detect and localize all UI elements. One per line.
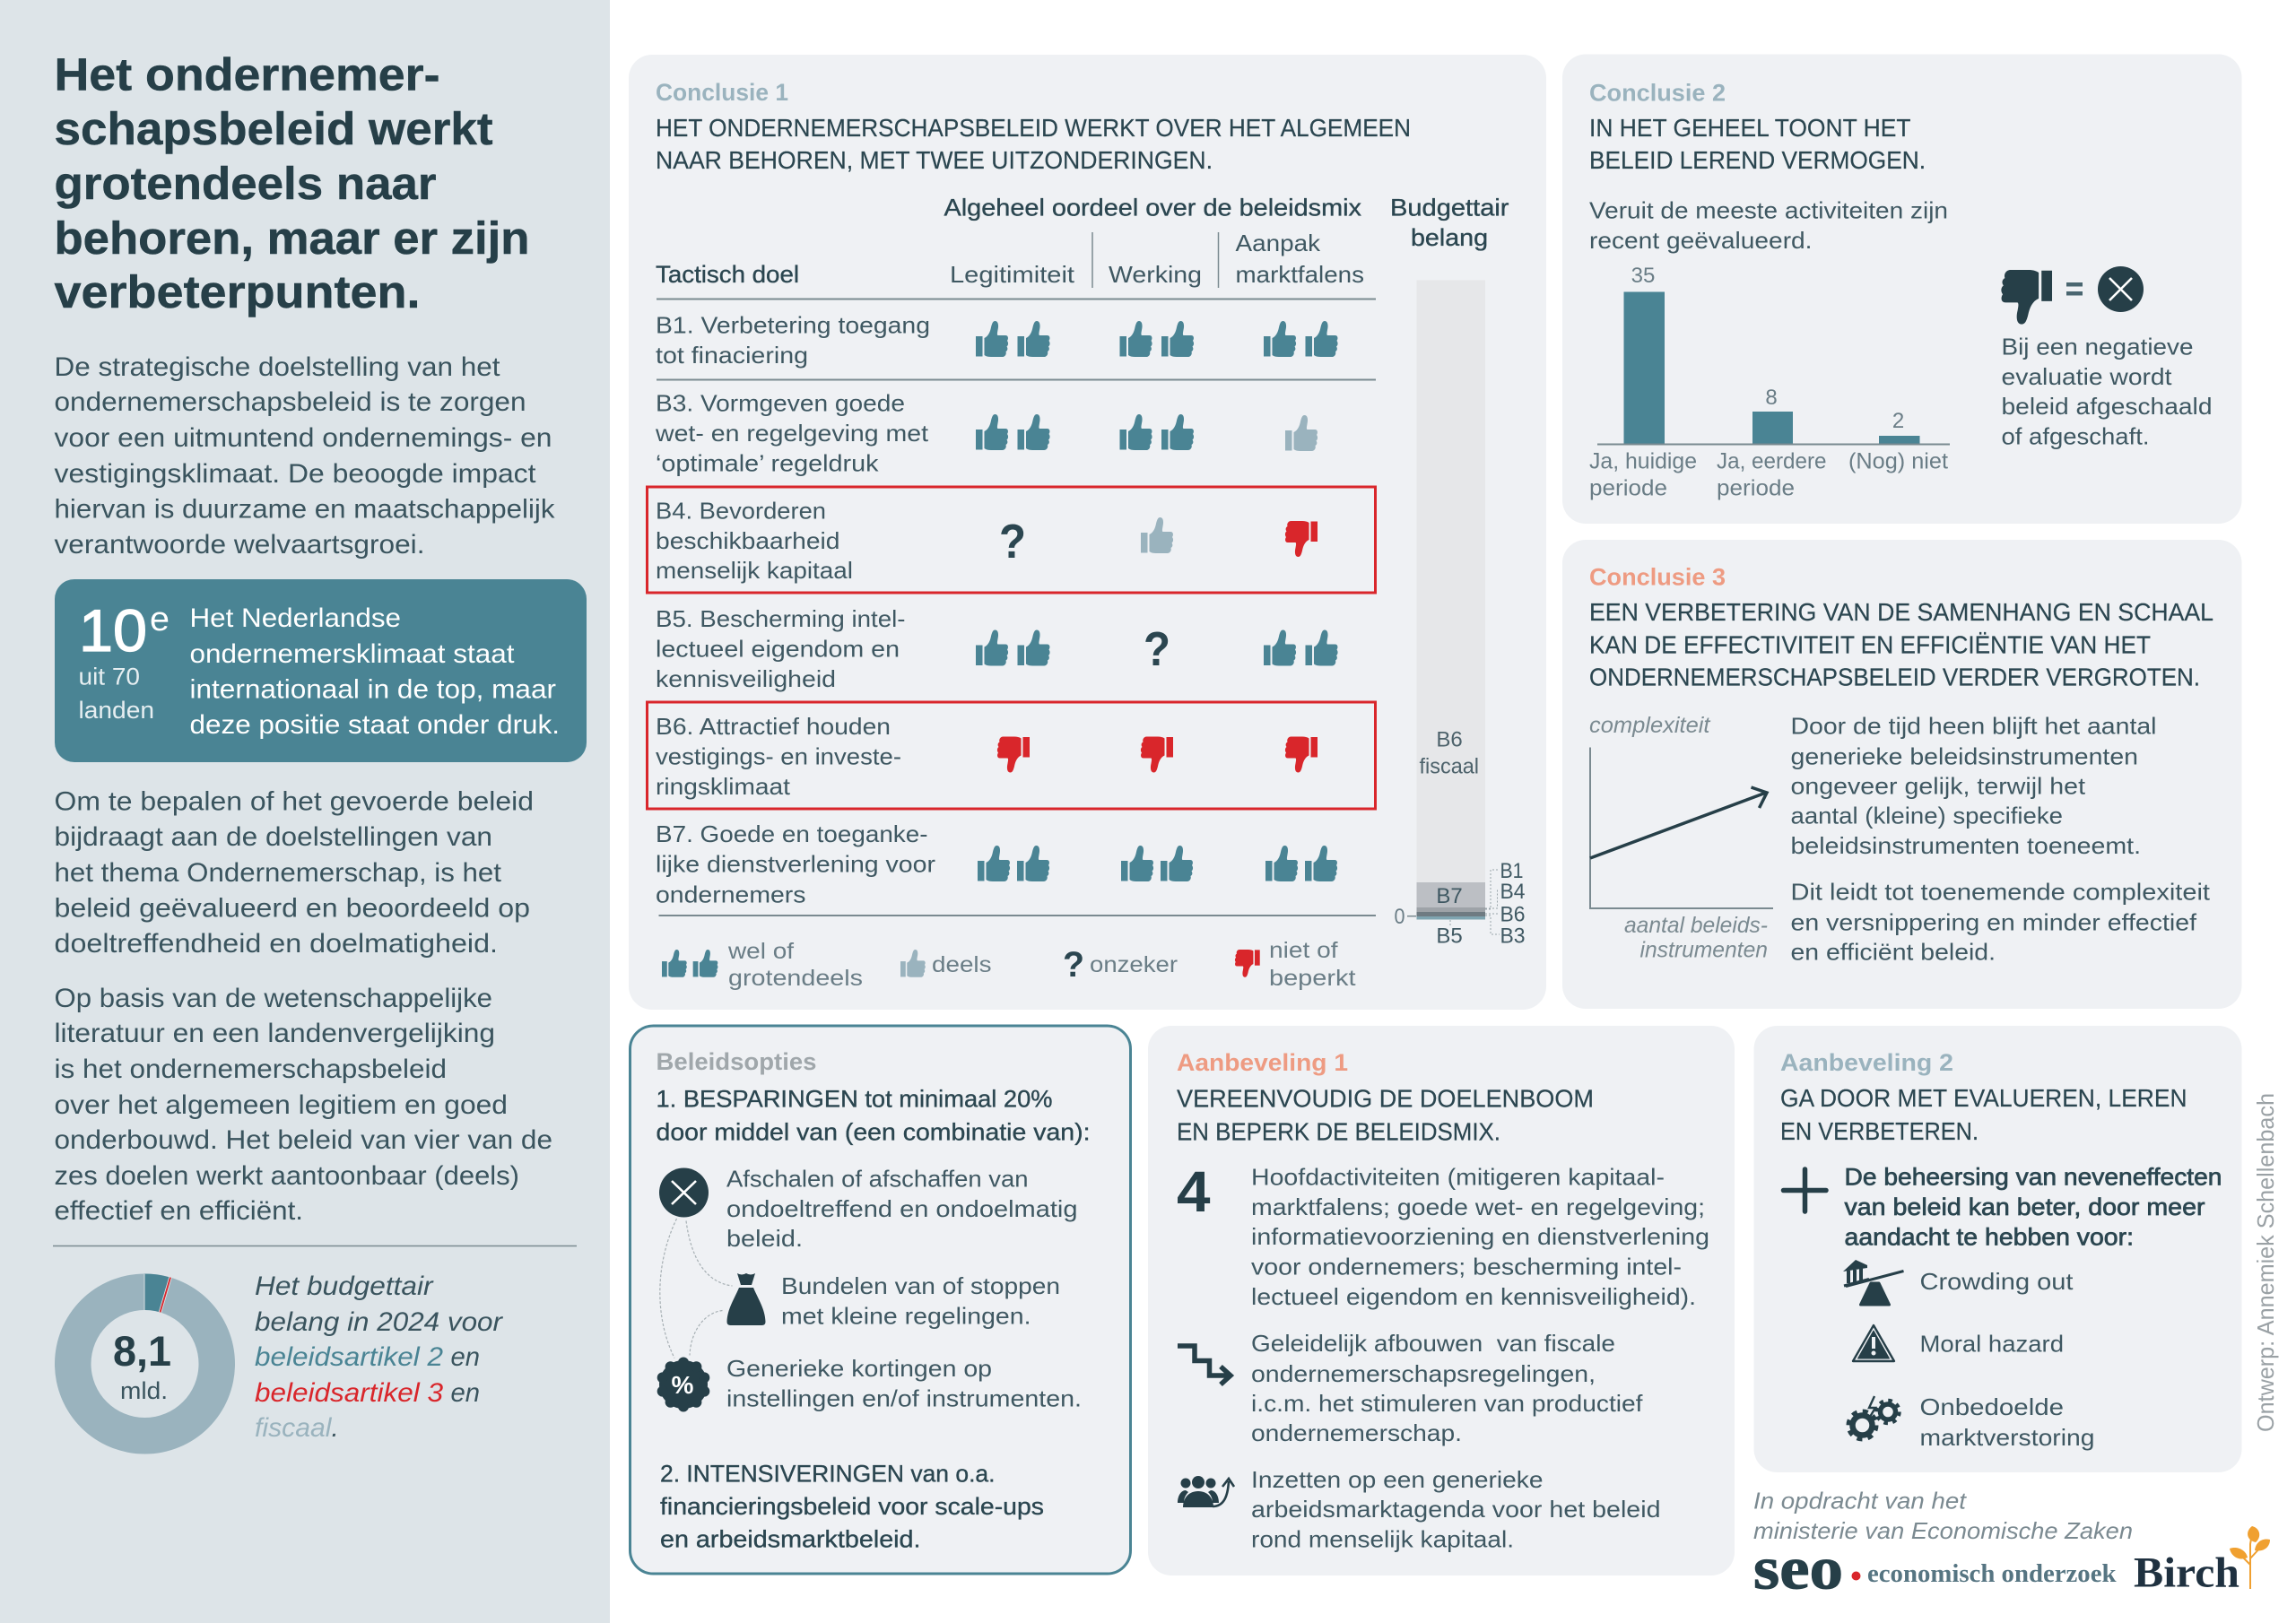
bar chart: evaluations: 35 <box>1631 264 1655 288</box>
text: bundelen: met kleine regelingen. <box>781 1302 1031 1329</box>
text: recent evaluated <box>1589 197 1948 254</box>
callout: 10e of 70 countries: landen <box>79 697 154 724</box>
logo: SEO economisch onderzoek <box>1753 1533 2117 1601</box>
heading: Aanbeveling 1 <box>1177 1049 1594 1146</box>
row: B5: B5. Bescherming intel- <box>656 605 906 632</box>
callout: 10e of 70 countries: ondernemersklimaat staat <box>190 639 515 669</box>
title: Het ondernemer- <box>54 48 439 100</box>
text: over time: Door de tijd heen blijft het aantal <box>1790 712 2156 739</box>
text block: strategic objective: vestigingsklimaat. De beoogde impact <box>54 459 536 489</box>
row: B7: B7. Goede en toeganke- <box>656 820 927 847</box>
text block: strategic objective: hiervan is duurzame en maatschappelijk <box>54 495 555 524</box>
row: B6 (highlighted): vestigings- en investe- <box>656 742 901 769</box>
text: hoofdactiviteiten <box>1251 1164 1709 1310</box>
row: B6 (highlighted): ringsklimaat <box>656 773 791 800</box>
line chart: complexity <box>1589 713 1773 963</box>
text block: evaluation: Om te bepalen of het gevoerde beleid <box>54 787 534 816</box>
heading: Conclusie 1: Conclusie 1 <box>656 79 788 106</box>
row: B3: B3. Vormgeven goede <box>656 389 905 416</box>
text: kortingen: Generieke kortingen op <box>726 1355 992 1382</box>
panel: Beleidsopties <box>630 1026 1130 1574</box>
line chart: complexity: complexiteit <box>1589 713 1711 738</box>
icon: percent badge: % <box>672 1371 694 1399</box>
table header: Legitimiteit <box>950 261 1075 288</box>
panel: Conclusie 2 <box>1562 54 2242 524</box>
heading: Conclusie 2: BELEID LEREND VERMOGEN. <box>1589 146 1926 174</box>
panel: Aanbeveling 2 <box>1754 1026 2242 1472</box>
panel: Aanbeveling 1 <box>1148 1026 1735 1575</box>
text: afbouwen: Geleidelijk afbouwen van fiscale <box>1251 1330 1615 1357</box>
text: negative evaluation: of afgeschaft. <box>2002 423 2149 450</box>
heading: Conclusie 2: Conclusie 2 <box>1589 79 1726 106</box>
heading: Beleidsopties: 1. BESPARINGEN tot minimaal 20% <box>657 1085 1053 1112</box>
row: B3: wet- en regelgeving met <box>655 420 929 447</box>
bar chart: evaluations: 8 <box>1765 386 1778 410</box>
logo: SEO economisch onderzoek: seo <box>1753 1533 1843 1601</box>
text: intensiveringen: en arbeidsmarktbeleid. <box>660 1526 920 1553</box>
text: over time: beleidsinstrumenten toeneemt. <box>1790 832 2141 859</box>
text: commissioned by: In opdracht van het <box>1753 1487 1968 1514</box>
heading: Conclusie 1 <box>656 79 1411 174</box>
row: B7 <box>656 820 1337 907</box>
heading: Beleidsopties <box>657 1048 1091 1146</box>
text: inzetten: Inzetten op een generieke <box>1251 1466 1543 1493</box>
legend: niet of <box>1269 938 1338 963</box>
title: behoren, maar er zijn <box>54 213 529 264</box>
row: B6 (highlighted): B6. Attractief houden <box>656 713 891 740</box>
bar chart: evaluations: (Nog) niet <box>1848 448 1948 473</box>
text: recent evaluated: recent geëvalueerd. <box>1589 227 1812 254</box>
row: B1: tot finaciering <box>656 342 808 369</box>
row: B6 (highlighted) <box>648 702 1376 809</box>
text: onbedoelde marktverstoring <box>1919 1393 2095 1451</box>
panel: Conclusie 3 <box>1562 540 2242 1009</box>
credit: design: Ontwerp: Annemiek Schellenbach <box>2252 1093 2279 1432</box>
text: complexity result: en versnippering en minder effectief <box>1790 909 2197 936</box>
icon: money bag <box>726 1273 766 1325</box>
text: afschalen: beleid. <box>726 1225 803 1252</box>
text: intensiveringen: financieringsbeleid voor scale-ups <box>660 1493 1044 1520</box>
row: B5: kennisveiligheid <box>656 665 836 692</box>
text block: strategic objective: ondernemerschapsbeleid is te zorgen <box>54 387 526 417</box>
heading: Aanbeveling 1: VEREENVOUDIG DE DOELENBOOM <box>1177 1085 1594 1112</box>
row: B4 (highlighted): ? <box>999 515 1026 568</box>
panel: Conclusie 1 <box>629 55 1546 1010</box>
text: over time <box>1790 712 2156 859</box>
text: hoofdactiviteiten: informatievoorziening en dienstverlening <box>1251 1223 1709 1250</box>
text block: strategic objective <box>54 352 555 560</box>
text block: findings <box>54 984 552 1226</box>
text block: findings: is het ondernemerschapsbeleid <box>54 1055 447 1084</box>
heading: Conclusie 1: HET ONDERNEMERSCHAPSBELEID WERKT OVER HET ALGEMEEN <box>656 114 1411 142</box>
heading: Aanbeveling 1: Aanbeveling 1 <box>1177 1049 1348 1076</box>
text block: budget explanation: en <box>450 1378 480 1408</box>
text block: budget explanation: belang in 2024 voor <box>255 1307 503 1337</box>
donut chart: budget 8,1 mld: mld. <box>120 1377 168 1404</box>
text: negative evaluation <box>2002 334 2212 450</box>
table header: Algeheel oordeel over de beleidsmix <box>944 194 1361 221</box>
text: beheersing: De beheersing van neveneffecten <box>1844 1164 2222 1191</box>
text block: findings: onderbouwd. Het beleid van vier van de <box>54 1125 552 1155</box>
icon: cross circle <box>659 1167 709 1218</box>
callout: 10e of 70 countries <box>55 579 587 762</box>
legend <box>662 938 1356 991</box>
dashed connectors <box>660 1219 732 1358</box>
heading: Conclusie 3 <box>1589 563 2213 690</box>
heading: Conclusie 3: Conclusie 3 <box>1589 563 1726 590</box>
text: hoofdactiviteiten: Hoofdactiviteiten (mitigeren kapitaal- <box>1251 1164 1665 1191</box>
text: negative evaluation: evaluatie wordt <box>2002 363 2172 390</box>
text block: findings: Op basis van de wetenschappelijke <box>54 984 492 1013</box>
icon: plus <box>1783 1169 1826 1211</box>
stacked bar: budgettair belang: 0 <box>1394 905 1405 929</box>
icon: thumb down equals cross <box>2001 266 2144 325</box>
bar chart: evaluations: Ja, eerdere <box>1717 448 1826 473</box>
text: afbouwen: ondernemerschap. <box>1251 1419 1462 1446</box>
text block: findings: literatuur en een landenvergelijking <box>54 1019 495 1048</box>
title: schapsbeleid werkt <box>54 103 493 154</box>
text block: budget explanation <box>255 1271 503 1443</box>
row: B7: ondernemers <box>656 881 805 907</box>
logo: Birch: Birch <box>2134 1549 2239 1596</box>
text block: findings: over het algemeen legitiem en goed <box>54 1090 508 1120</box>
heading: Conclusie 3: KAN DE EFFECTIVITEIT EN EFFICIËNTIE VAN HET <box>1589 631 2151 658</box>
line chart: complexity: instrumenten <box>1639 938 1768 963</box>
text: complexity result: en efficiënt beleid. <box>1790 938 1996 965</box>
bar chart: evaluations: periode <box>1589 475 1667 500</box>
text: inzetten: arbeidsmarktagenda voor het beleid <box>1251 1496 1661 1523</box>
bar chart: evaluations: Ja, huidige <box>1589 448 1697 473</box>
stacked bar: budgettair belang: B5 <box>1436 924 1463 949</box>
table header: Werking <box>1109 261 1202 288</box>
bar chart: evaluations <box>1589 264 1950 500</box>
donut chart: budget 8,1 mld: 8,1 <box>113 1327 171 1375</box>
text block: strategic objective: De strategische doelstelling van het <box>54 352 500 382</box>
stacked bar: budgettair belang: fiscaal <box>1419 755 1479 778</box>
heading: Aanbeveling 1: EN BEPERK DE BELEIDSMIX. <box>1177 1117 1500 1146</box>
row: B3: ‘optimale’ regeldruk <box>656 450 880 477</box>
text block: budget explanation: beleidsartikel 3 <box>255 1378 444 1408</box>
text: inzetten <box>1251 1466 1661 1553</box>
text: crowding out: Crowding out <box>1919 1268 2074 1295</box>
text: over time: ongeveer gelijk, terwijl het <box>1790 773 2086 800</box>
heading: Beleidsopties: Beleidsopties <box>657 1048 816 1075</box>
text: onbedoelde marktverstoring: marktverstoring <box>1919 1424 2095 1451</box>
text: hoofdactiviteiten: lectueel eigendom en kennisveiligheid). <box>1251 1283 1696 1310</box>
text: bundelen <box>781 1272 1060 1329</box>
stacked bar: budgettair belang: B6 <box>1500 902 1525 927</box>
text: afschalen <box>726 1166 1078 1252</box>
text: commissioned by: ministerie van Economische Zaken <box>1753 1517 2133 1544</box>
heading: Conclusie 2 <box>1589 79 1926 174</box>
title: grotendeels naar <box>54 158 437 209</box>
row: B4 (highlighted): beschikbaarheid <box>656 527 839 554</box>
heading: Aanbeveling 2: EN VERBETEREN. <box>1780 1117 1979 1145</box>
legend: wel of <box>727 939 794 964</box>
text: commissioned by <box>1753 1487 2133 1544</box>
table header <box>656 194 1364 288</box>
bar chart: evaluations: 2 <box>1892 409 1904 433</box>
text: beheersing: van beleid kan beter, door meer <box>1844 1193 2205 1220</box>
text block: budget explanation: beleidsartikel 2 <box>255 1342 443 1372</box>
text: recent evaluated: Veruit de meeste activiteiten zijn <box>1589 197 1948 224</box>
text: beheersing <box>1844 1164 2222 1250</box>
table header: Tactisch doel <box>656 261 799 288</box>
icon: number 4: 4 <box>1177 1159 1211 1224</box>
callout: 10e of 70 countries: 10 <box>79 597 147 664</box>
row: B5 <box>656 605 1338 692</box>
text: over time: generieke beleidsinstrumenten <box>1790 742 2138 769</box>
logo: SEO economisch onderzoek: economisch onderzoek <box>1867 1559 2117 1588</box>
row: B5: ? <box>1144 622 1170 676</box>
stacked bar: budgettair belang: B7 <box>1436 884 1463 908</box>
text: complexity result <box>1790 879 2211 965</box>
text block: budget explanation: . <box>332 1413 339 1443</box>
donut chart: budget 8,1 mld <box>55 1273 235 1454</box>
heading: Conclusie 3: ONDERNEMERSCHAPSBELEID VERDER VERGROTEN. <box>1589 664 2200 690</box>
row: B1 <box>656 312 1338 369</box>
text: beheersing: aandacht te hebben voor: <box>1844 1223 2134 1250</box>
text block: budget explanation: fiscaal <box>255 1413 333 1443</box>
stacked bar: budgettair belang: B4 <box>1500 880 1525 904</box>
bar chart: evaluations: periode <box>1717 475 1795 500</box>
callout: 10e of 70 countries: deze positie staat onder druk. <box>190 710 560 740</box>
stacked bar: budgettair belang <box>1390 194 1525 949</box>
legend: beperkt <box>1269 966 1356 991</box>
text block: evaluation: bijdraagt aan de doelstellingen van <box>54 822 492 852</box>
text block: evaluation: doeltreffendheid en doelmatigheid. <box>54 929 498 959</box>
callout: 10e of 70 countries: Het Nederlandse <box>190 603 401 633</box>
heading: Aanbeveling 2 <box>1780 1049 2187 1145</box>
text block: budget explanation: Het budgettair <box>255 1271 434 1301</box>
text: kortingen <box>726 1355 1082 1411</box>
text: afschalen: ondoeltreffend en ondoelmatig <box>726 1195 1078 1222</box>
text: over time: aantal (kleine) specifieke <box>1790 802 2063 829</box>
text block: findings: zes doelen werkt aantoonbaar (deels) <box>54 1161 519 1191</box>
text: afbouwen: ondernemerschapsregelingen, <box>1251 1360 1596 1387</box>
stacked bar: budgettair belang: B3 <box>1500 924 1525 949</box>
stacked bar: budgettair belang: B1 <box>1500 859 1523 883</box>
icon: seesaw with bank <box>1843 1260 1903 1305</box>
heading: Conclusie 3: EEN VERBETERING VAN DE SAMENHANG EN SCHAAL <box>1589 598 2213 626</box>
legend: onzeker <box>1090 952 1178 977</box>
row: B5: lectueel eigendom en <box>656 635 900 662</box>
callout: 10e of 70 countries: e <box>150 601 170 638</box>
panel: left summary column <box>0 0 610 1623</box>
heading: Conclusie 2: IN HET GEHEEL TOONT HET <box>1589 114 1911 142</box>
text block: strategic objective: verantwoorde welvaartsgroei. <box>54 530 425 560</box>
text: inzetten: rond menselijk kapitaal. <box>1251 1526 1514 1553</box>
text: afbouwen: i.c.m. het stimuleren van productief <box>1251 1390 1643 1417</box>
text: hoofdactiviteiten: voor ondernemers; bescherming intel- <box>1251 1254 1682 1280</box>
text block: evaluation: het thema Ondernemerschap, is het <box>54 858 501 888</box>
row: B3 <box>655 389 1318 477</box>
table header: Aanpak <box>1236 230 1321 256</box>
text: complexity result: Dit leidt tot toenemende complexiteit <box>1790 879 2211 906</box>
icon: gears <box>1848 1396 1900 1439</box>
text: afbouwen <box>1251 1330 1643 1446</box>
text: kortingen: instellingen en/of instrumenten. <box>726 1384 1082 1411</box>
text: hoofdactiviteiten: marktfalens; goede wet- en regelgeving; <box>1251 1193 1705 1220</box>
row: B7: lijke dienstverlening voor <box>656 850 935 877</box>
text block: evaluation <box>54 787 534 959</box>
line chart: complexity: aantal beleids- <box>1624 913 1768 938</box>
stacked bar: budgettair belang: B6 <box>1436 728 1463 751</box>
text block: budget explanation: en <box>450 1342 480 1372</box>
text: intensiveringen: 2. INTENSIVERINGEN van o.a. <box>660 1460 996 1487</box>
text block: findings: effectief en efficiënt. <box>54 1196 303 1226</box>
heading: Beleidsopties: door middel van (een combinatie van): <box>657 1119 1091 1146</box>
text: moral hazard: Moral hazard <box>1919 1331 2064 1358</box>
callout: 10e of 70 countries: uit 70 <box>79 664 140 690</box>
row: B4 (highlighted): B4. Bevorderen <box>656 497 826 524</box>
stacked bar: budgettair belang: belang <box>1411 224 1488 251</box>
text: bundelen: Bundelen van of stoppen <box>781 1272 1060 1299</box>
stacked bar: budgettair belang: Budgettair <box>1390 194 1509 221</box>
icon: people with arrow <box>1178 1476 1234 1507</box>
legend: deels <box>932 952 992 977</box>
heading: Aanbeveling 2: GA DOOR MET EVALUEREN, LEREN <box>1780 1084 2187 1112</box>
row: B4 (highlighted): menselijk kapitaal <box>656 557 853 584</box>
text: afschalen: Afschalen of afschaffen van <box>726 1166 1028 1193</box>
callout: 10e of 70 countries: internationaal in de top, maar <box>190 674 556 705</box>
text block: strategic objective: voor een uitmuntend ondernemings- en <box>54 423 552 453</box>
text: intensiveringen <box>660 1460 1044 1553</box>
text: negative evaluation: Bij een negatieve <box>2002 334 2194 360</box>
icon: warning triangle <box>1853 1325 1894 1361</box>
text block: evaluation: beleid geëvalueerd en beoordeeld op <box>54 893 530 924</box>
text: negative evaluation: beleid afgeschaald <box>2002 393 2212 420</box>
heading: Aanbeveling 2: Aanbeveling 2 <box>1780 1049 1953 1076</box>
icon: percent badge <box>657 1358 709 1411</box>
logo: Birch <box>2134 1526 2270 1596</box>
text: onbedoelde marktverstoring: Onbedoelde <box>1919 1393 2064 1420</box>
table header: marktfalens <box>1236 261 1364 288</box>
heading: Conclusie 1: NAAR BEHOREN, MET TWEE UITZONDERINGEN. <box>656 146 1213 174</box>
icon: stepwise down arrow <box>1178 1346 1231 1384</box>
title: verbeterpunten. <box>54 266 420 317</box>
legend: grotendeels <box>728 966 863 991</box>
title <box>54 48 529 317</box>
legend: ? <box>1063 945 1084 985</box>
row: B1: B1. Verbetering toegang <box>656 312 930 339</box>
row: B4 (highlighted) <box>648 487 1376 593</box>
